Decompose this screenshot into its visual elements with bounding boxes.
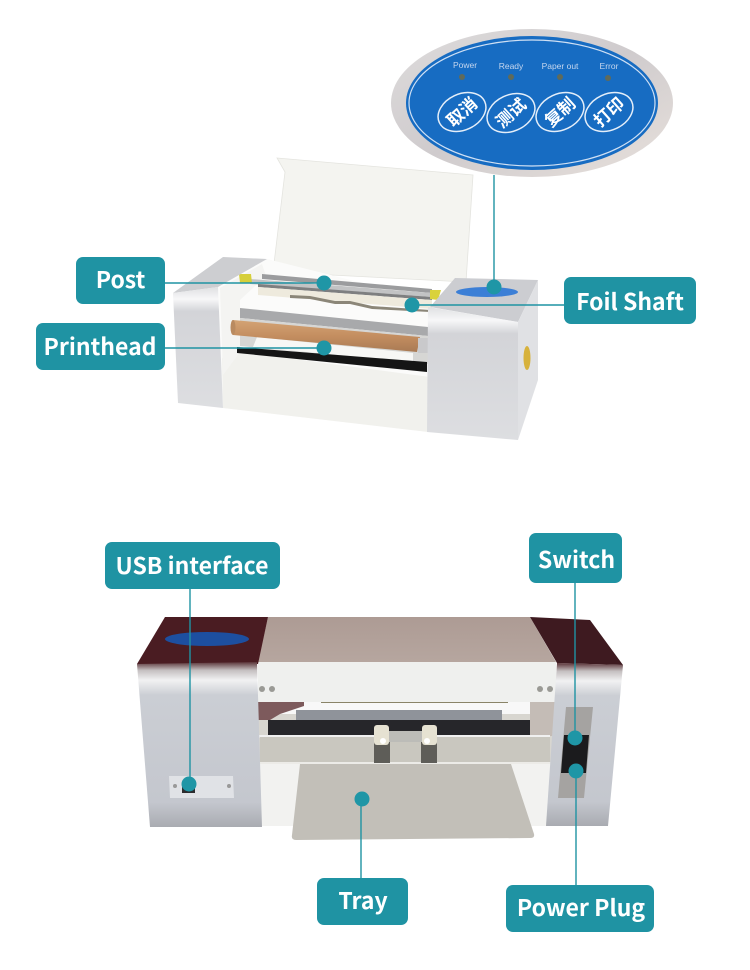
label: Post: [76, 257, 165, 304]
left block: [173, 257, 267, 293]
indicator lights: [459, 74, 611, 81]
indicator labels: Ready: [499, 61, 524, 71]
center top surface: [258, 617, 556, 662]
icon: yellow end caps: [239, 274, 441, 300]
white front cover: [258, 662, 556, 702]
label: Tray: [317, 878, 408, 925]
oval plate: [391, 29, 673, 177]
right block: [430, 278, 538, 322]
right block: [530, 617, 623, 665]
USB plate: [169, 776, 234, 798]
indicator labels: Error: [600, 61, 619, 71]
left block: [137, 617, 268, 664]
label: Tray: Tray: [338, 882, 388, 916]
label: Post: Post: [96, 261, 146, 295]
print mechanism: [240, 308, 428, 336]
label: Foil Shaft: [564, 277, 696, 324]
label: Power Plug: [506, 885, 654, 932]
icon: gold knob: [524, 346, 530, 370]
button: print: 打印: [587, 90, 629, 132]
icon: cover screws: [259, 686, 553, 692]
label: Switch: Switch: [538, 541, 615, 575]
label: USB interface: USB interface: [116, 547, 268, 581]
indicator labels: Power: [453, 60, 477, 70]
button: print: [579, 85, 639, 139]
posts and shafts: [262, 274, 432, 293]
blue oval on left block: [165, 632, 249, 646]
interior opening: [258, 702, 556, 764]
marker dots: [182, 276, 584, 806]
connector lines: [165, 175, 576, 885]
button: test: 测试: [489, 91, 531, 133]
indicator labels: [453, 60, 619, 71]
cardboard roller: [233, 320, 420, 352]
button: copy: [530, 85, 590, 139]
lower machine photo: [137, 617, 623, 840]
open lid: [273, 158, 473, 282]
label: Power Plug: Power Plug: [517, 889, 645, 923]
button: test: [481, 86, 541, 140]
control panel close-up: [391, 29, 673, 177]
machine body: [218, 259, 430, 432]
button: cancel: [432, 85, 492, 139]
indicator labels: Paper out: [542, 61, 579, 71]
switch and plug plate: [558, 707, 593, 798]
label: Switch: [529, 533, 622, 583]
tray: [292, 764, 534, 840]
label: Printhead: Printhead: [44, 328, 156, 362]
label: Printhead: [36, 323, 165, 370]
label: Foil Shaft: Foil Shaft: [576, 283, 684, 317]
base white panel: [258, 763, 556, 826]
button: copy: 复制: [538, 90, 580, 132]
icon: blue oval on machine: [456, 287, 518, 297]
button: cancel: 取消: [440, 90, 482, 132]
label: USB interface: [105, 542, 280, 589]
upper machine photo: [173, 158, 538, 440]
icon: carriage clamps: [374, 725, 437, 763]
